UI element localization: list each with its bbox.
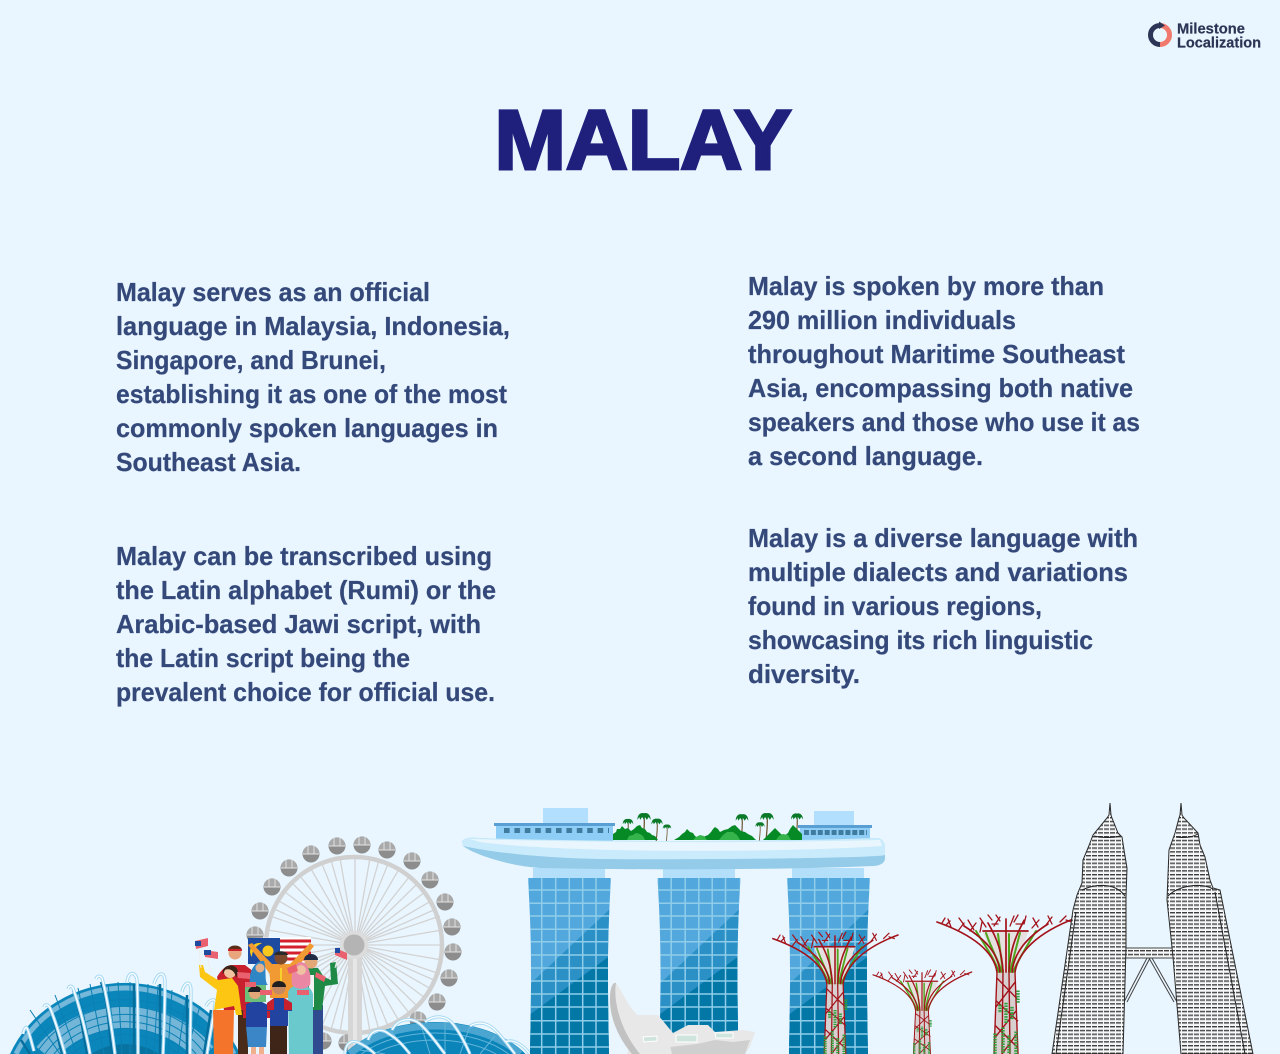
rooftop right building: [798, 811, 872, 841]
text block: dialects: found in various regions,: [748, 591, 1042, 621]
text block: dialects: Malay is a diverse language with: [748, 523, 1138, 553]
icon: logo ring: [1150, 22, 1170, 44]
tower 3: [787, 878, 870, 1054]
small hand flags: [195, 938, 347, 995]
text block: speakers: 290 million individuals: [748, 305, 1016, 335]
tower necks: [533, 868, 864, 879]
text block: speakers: speakers and those who use it as: [748, 407, 1140, 437]
ferris wheel gondolas: [246, 836, 462, 1052]
logo wordmark: Localization: [1177, 36, 1261, 52]
right tower: [1167, 803, 1253, 1054]
text block: official language: establishing it as one of the most: [116, 379, 507, 409]
illustration: ArtScience Museum: [610, 983, 755, 1054]
tower 1: [528, 878, 611, 1054]
logo wordmark: Milestone: [1177, 22, 1245, 38]
boy: [267, 981, 292, 1054]
man in red: [217, 946, 254, 1054]
text block: speakers: a second language.: [748, 441, 983, 471]
illustration: ferris wheel: [246, 836, 462, 1054]
large Malaysian flag: [248, 937, 311, 964]
text block: speakers: Asia, encompassing both native: [748, 373, 1133, 403]
text block: scripts: the Latin alphabet (Rumi) or the: [116, 575, 496, 605]
logo wordmark: [1177, 22, 1261, 52]
illustration: Marina Bay Sands: [462, 808, 885, 1054]
text block: dialects: [748, 523, 1138, 689]
illustration: Petronas Towers: [1052, 803, 1253, 1054]
text block: scripts: Malay can be transcribed using: [116, 541, 492, 571]
title: MALAY: [494, 93, 792, 187]
rooftop left building: [494, 808, 615, 841]
woman in pink hijab: [288, 962, 313, 1054]
tower tier lines: [1056, 834, 1245, 1054]
text block: scripts: [116, 541, 496, 707]
man in orange raising flag: [248, 943, 314, 998]
text block: speakers: Malay is spoken by more than: [748, 271, 1104, 301]
rooftop bushes: [613, 825, 802, 840]
text block: official language: commonly spoken languages in: [116, 413, 498, 443]
text block: scripts: Arabic-based Jawi script, with: [116, 609, 481, 639]
text block: dialects: showcasing its rich linguistic: [748, 625, 1093, 655]
illustration: right dome: [344, 1017, 530, 1054]
text block: official language: language in Malaysia, Indonesia,: [116, 311, 510, 341]
tower 2: [658, 878, 740, 1054]
sky park deck: [462, 838, 885, 869]
text block: speakers: throughout Maritime Southeast: [748, 339, 1125, 369]
illustration: large supertree: [937, 915, 1076, 1054]
girl: [243, 986, 270, 1054]
text block: official language: Singapore, and Brunei,: [116, 345, 386, 375]
illustration: left dome: [10, 973, 240, 1054]
illustration: supertree on tower: [773, 932, 898, 1054]
illustration: group of people with flags: [195, 937, 347, 1054]
text block: speakers: [748, 271, 1140, 471]
text block: scripts: prevalent choice for official use.: [116, 677, 495, 707]
text block: dialects: multiple dialects and variations: [748, 557, 1128, 587]
man in green: [304, 954, 338, 1054]
text block: official language: Southeast Asia.: [116, 447, 301, 477]
logo: Milestone Localization: [1150, 22, 1261, 52]
text block: dialects: diversity.: [748, 659, 860, 689]
woman in blue hijab: [245, 961, 268, 1002]
skybridge: [1120, 948, 1178, 1002]
woman in yellow with orange skirt: [199, 965, 242, 1054]
rooftop palms: [623, 813, 803, 841]
text block: official language: Malay serves as an official: [116, 277, 430, 307]
left tower: [1052, 803, 1127, 1054]
illustration: small supertree: [873, 970, 972, 1054]
text block: scripts: the Latin script being the: [116, 643, 410, 673]
text block: official language: [116, 277, 510, 477]
